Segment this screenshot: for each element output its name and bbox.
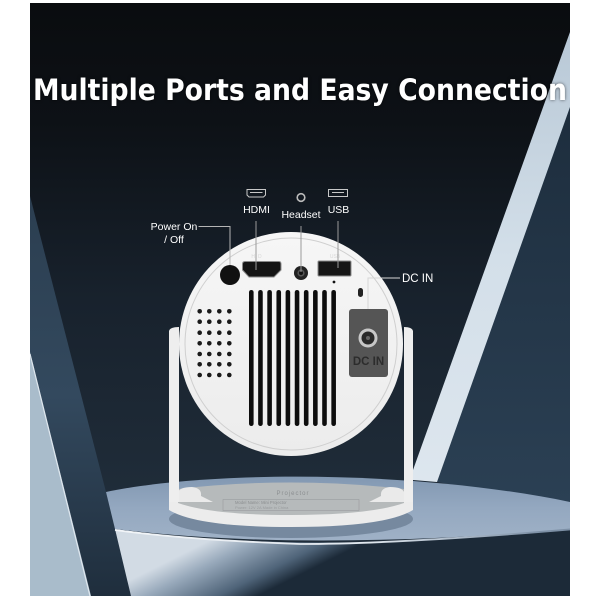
label: Power On / Off: / Off xyxy=(164,234,184,246)
DC IN panel xyxy=(349,309,388,377)
label: Power On / Off: Power On xyxy=(151,221,198,233)
headset jack xyxy=(294,266,308,280)
power button xyxy=(220,265,240,285)
right dark panel xyxy=(437,100,575,505)
left foot xyxy=(178,487,213,502)
stand base xyxy=(169,500,413,527)
label: Headset: Headset xyxy=(281,209,321,221)
label: HDMI: HDMI xyxy=(243,204,270,216)
USB silk text: USB xyxy=(330,254,341,260)
disc inner ring xyxy=(185,238,397,450)
pedestal rim highlight xyxy=(115,529,575,544)
plate label: Projector xyxy=(276,491,310,497)
plate label: Power: 12V 2A Made in China xyxy=(235,505,289,510)
right light beam xyxy=(413,32,570,482)
vent slots xyxy=(249,290,336,426)
label: Headset xyxy=(281,194,321,272)
base shadow xyxy=(169,513,413,538)
pedestal body xyxy=(115,529,354,596)
label: Power On / Off xyxy=(151,221,230,265)
left light panel xyxy=(30,352,91,596)
right foot xyxy=(369,487,404,502)
HDMI port xyxy=(242,262,281,277)
label: HDMI xyxy=(243,190,270,270)
speaker holes xyxy=(197,309,232,377)
indicator dot xyxy=(333,281,335,283)
HDMI silk text: HD xyxy=(251,254,265,260)
icon: headset xyxy=(297,194,305,201)
stand xyxy=(169,327,413,527)
plate label xyxy=(223,491,359,510)
USB port xyxy=(318,261,351,276)
label: DC IN xyxy=(368,273,433,309)
label: DC IN: DC IN xyxy=(402,273,433,285)
left arm xyxy=(169,327,179,502)
label: USB: USB xyxy=(328,204,349,216)
plate label: Model Name: Mini Projector xyxy=(235,500,287,505)
right arm xyxy=(404,327,413,502)
projector xyxy=(169,232,413,527)
left dark band xyxy=(30,196,123,566)
reset slot xyxy=(358,288,363,297)
icon: HDMI xyxy=(247,190,266,197)
pedestal top xyxy=(106,477,575,540)
icon: USB xyxy=(328,190,348,196)
DC IN panel: DC IN xyxy=(353,356,384,368)
label: USB xyxy=(328,190,349,268)
main disc xyxy=(179,232,403,456)
pedestal xyxy=(106,477,575,596)
base plate xyxy=(178,482,404,515)
title: Multiple Ports and Easy Connection xyxy=(33,73,567,107)
